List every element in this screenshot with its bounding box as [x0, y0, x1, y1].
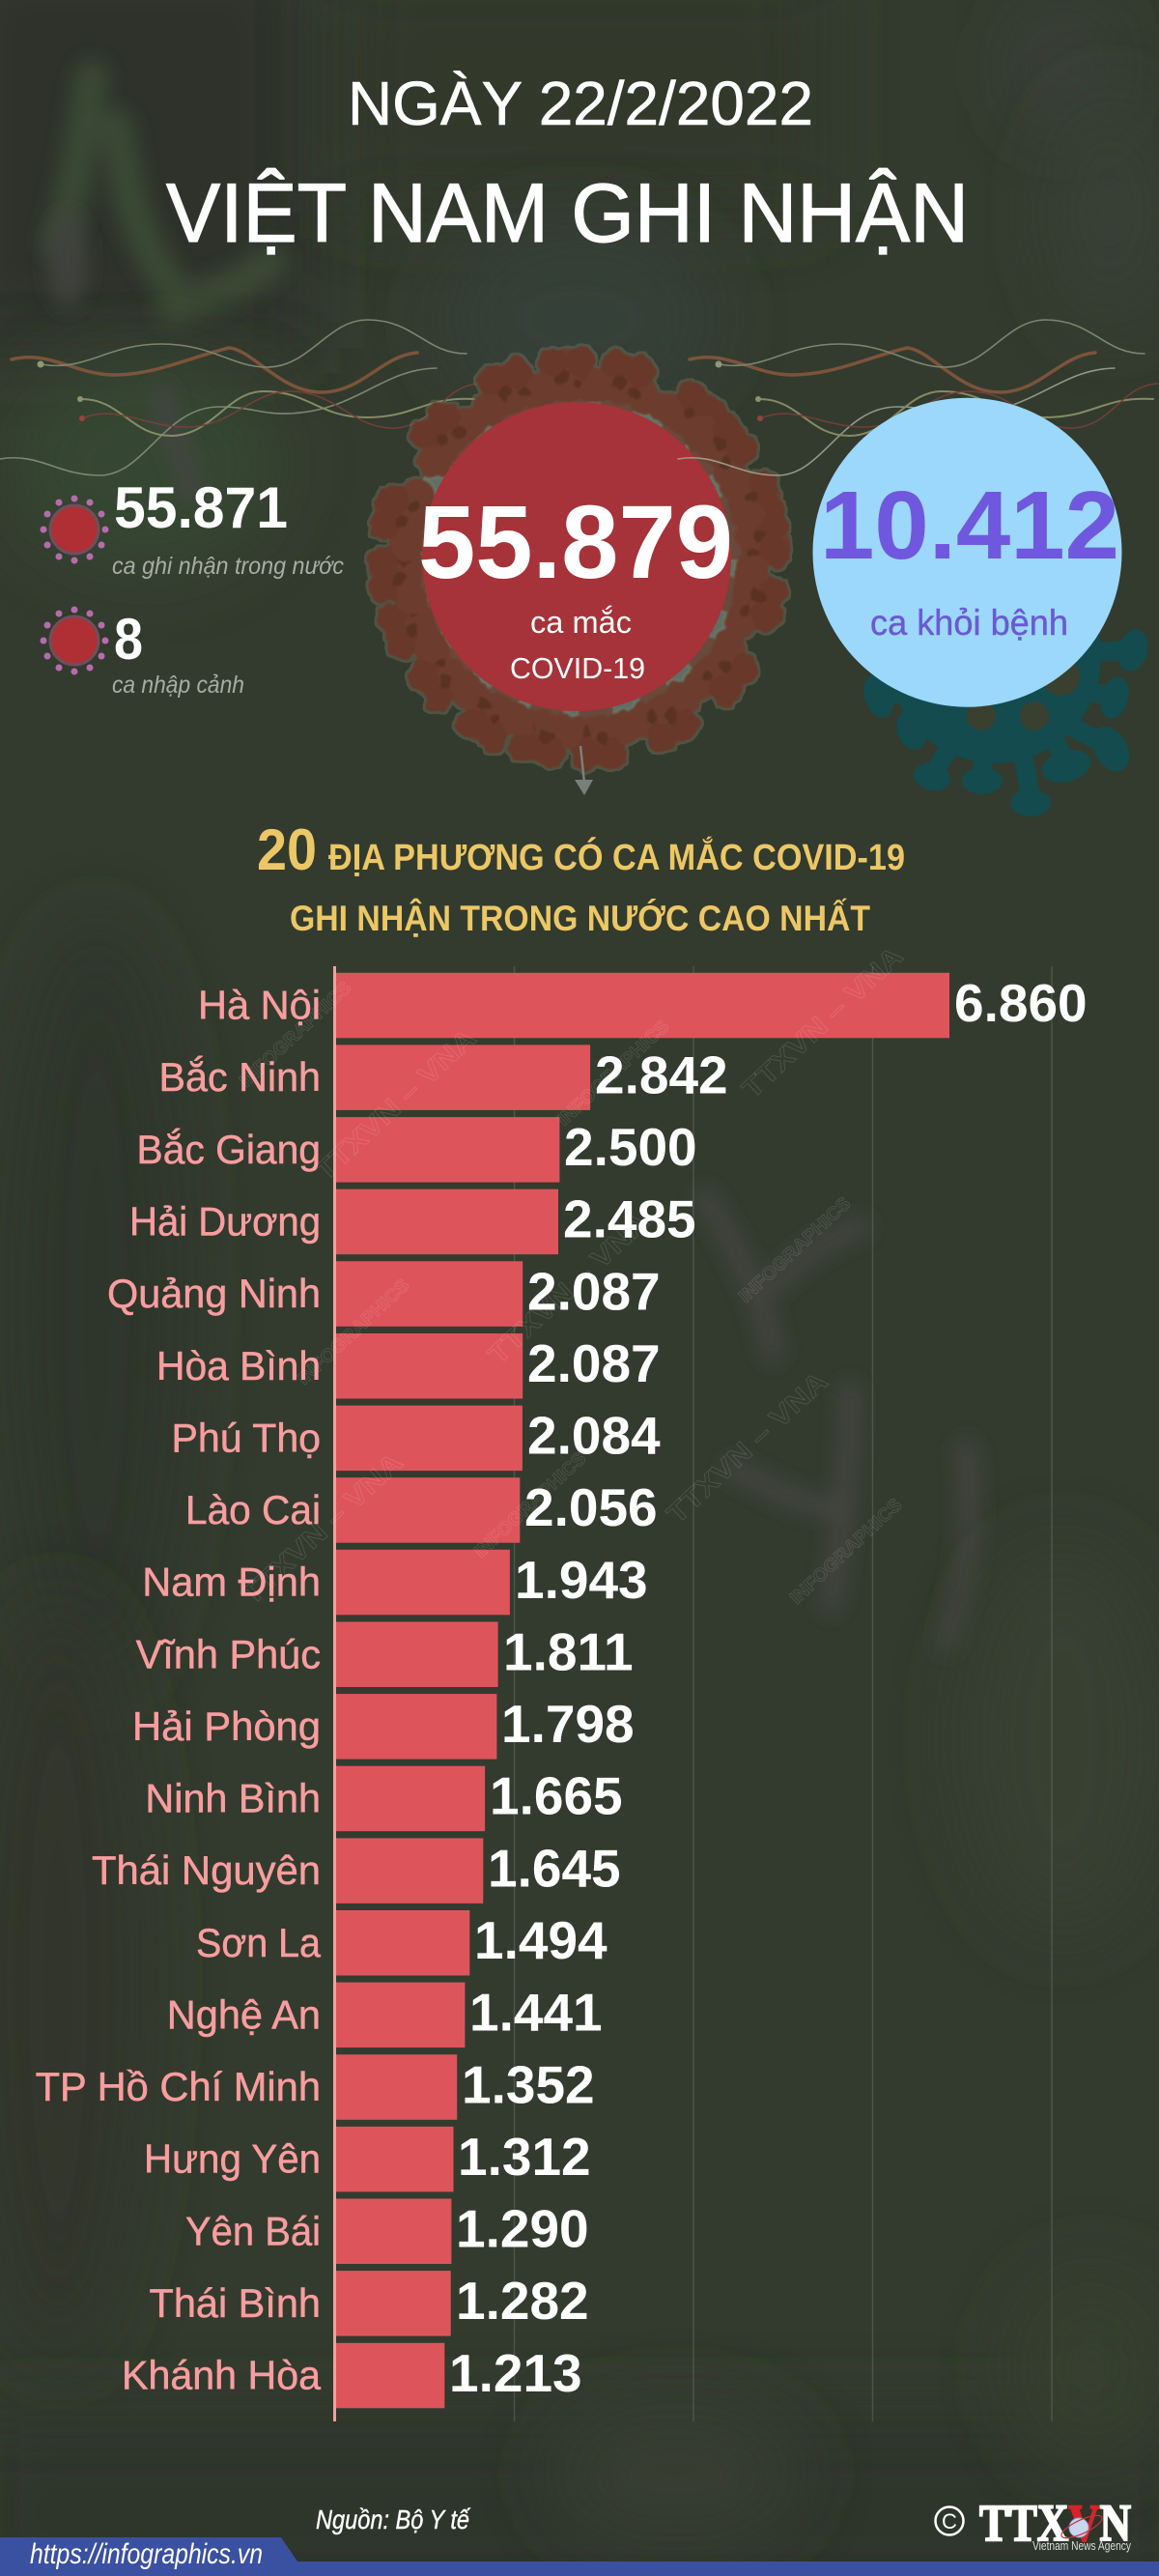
chart heading: ĐỊA PHƯƠNG CÓ CA MẮC COVID-19: [328, 836, 905, 878]
row: Yên Bái: 1.290: [456, 2199, 589, 2259]
row: Hải Phòng: Hải Phòng: [132, 1703, 321, 1749]
large coronavirus illustration: [363, 342, 796, 775]
total cases caption: ca mắc: [530, 605, 632, 640]
watermarks: [236, 940, 909, 1611]
row: Phú Thọ: [172, 1406, 661, 1471]
row: TP Hồ Chí Minh: [36, 2054, 595, 2120]
row: Nghệ An: 1.441: [469, 1983, 603, 2043]
watermarks: INFOGRAPHICS: [294, 1275, 413, 1389]
row: Hưng Yên: 1.312: [458, 2127, 591, 2187]
watermarks: TTXVN – VNA: [309, 1022, 482, 1187]
source note: Nguồn: Bộ Y tế: [316, 2504, 471, 2534]
row: Bắc Ninh: 2.842: [595, 1045, 728, 1104]
blue recovered circle: [813, 398, 1122, 707]
row: Hưng Yên: Hưng Yên: [144, 2136, 321, 2182]
watermarks: INFOGRAPHICS: [470, 1448, 590, 1562]
recovered number: 10.412: [820, 472, 1119, 580]
icon: small virus, domestic: [41, 495, 108, 564]
watermarks: TTXVN – VNA: [661, 1365, 834, 1530]
row: Hưng Yên: [144, 2127, 591, 2191]
row: Nam Định: 1.943: [515, 1550, 648, 1610]
row: TP Hồ Chí Minh: 1.352: [462, 2054, 595, 2114]
bar chart: 20 localities: [36, 966, 1088, 2421]
watermarks: TTXVN – VNA: [482, 1206, 655, 1370]
recovered caption: ca khỏi bệnh: [870, 603, 1068, 643]
decorative wavy lines: right: [678, 320, 1158, 475]
row: Thái Nguyên: Thái Nguyên: [92, 1847, 321, 1893]
copyright symbol: C: [942, 2509, 957, 2533]
footer band with URL: https://infographics.vn: [30, 2538, 263, 2570]
row: Hòa Bình: [156, 1333, 661, 1399]
row: Nam Định: Nam Định: [142, 1560, 321, 1605]
imported cases caption: ca nhập cảnh: [112, 672, 244, 699]
watermarks: INFOGRAPHICS: [735, 1193, 855, 1307]
row: Yên Bái: Yên Bái: [185, 2208, 321, 2253]
row: Ninh Bình: [145, 1766, 623, 1831]
row: Hòa Bình: 2.087: [527, 1333, 661, 1393]
row: Lào Cai: [185, 1477, 658, 1543]
row: Hải Dương: [129, 1189, 696, 1254]
row: Nghệ An: Nghệ An: [167, 1991, 321, 2037]
row: Bắc Giang: 2.500: [564, 1117, 697, 1177]
row: Nam Định: [142, 1550, 648, 1615]
row: Bắc Giang: [137, 1117, 697, 1183]
row: Phú Thọ: 2.084: [527, 1406, 661, 1466]
row: Vĩnh Phúc: [136, 1621, 634, 1687]
row: Bắc Ninh: [158, 1045, 728, 1110]
row: TP Hồ Chí Minh: TP Hồ Chí Minh: [36, 2064, 321, 2109]
icon: small virus, imported: [41, 607, 108, 674]
row: Sơn La: [196, 1910, 608, 1975]
total cases caption: [510, 605, 645, 685]
row: Hà Nội: Hà Nội: [198, 983, 321, 1028]
title: date: NGÀY 22/2/2022: [348, 69, 813, 138]
row: Hải Phòng: 1.798: [501, 1694, 635, 1754]
imported cases number: 8: [114, 607, 143, 672]
row: Ninh Bình: 1.665: [490, 1766, 623, 1826]
chart heading: [257, 817, 905, 938]
row: Lào Cai: Lào Cai: [185, 1487, 321, 1532]
row: Vĩnh Phúc: Vĩnh Phúc: [136, 1631, 321, 1676]
watermarks: INFOGRAPHICS: [236, 978, 355, 1092]
title: headline: VIỆT NAM GHI NHẬN: [166, 167, 969, 260]
row: Khánh Hòa: Khánh Hòa: [122, 2353, 322, 2398]
chart heading: GHI NHẬN TRONG NƯỚC CAO NHẤT: [290, 898, 870, 938]
watermarks: TTXVN – VNA: [736, 940, 909, 1104]
row: Hải Phòng: [132, 1694, 635, 1760]
row: Hà Nội: [198, 973, 1088, 1038]
domestic cases number: 55.871: [114, 475, 288, 540]
watermarks: INFOGRAPHICS: [553, 1016, 673, 1131]
row: Hải Dương: Hải Dương: [129, 1198, 321, 1245]
row: Thái Bình: [149, 2271, 589, 2336]
chart axis: [333, 966, 336, 2421]
decorative wavy lines: left: [0, 320, 480, 475]
row: Quảng Ninh: [107, 1261, 661, 1327]
row: Vĩnh Phúc: 1.811: [503, 1621, 634, 1681]
row: Ninh Bình: Ninh Bình: [145, 1776, 321, 1820]
row: Thái Bình: 1.282: [456, 2271, 589, 2331]
row: Bắc Ninh: Bắc Ninh: [158, 1054, 321, 1100]
row: Thái Nguyên: [92, 1838, 621, 1903]
red total cases circle: [422, 402, 731, 711]
arrow down to chart: [575, 746, 593, 795]
row: Lào Cai: 2.056: [524, 1477, 658, 1537]
row: Khánh Hòa: [122, 2343, 582, 2408]
domestic cases caption: ca ghi nhận trong nước: [112, 553, 344, 580]
total cases caption: COVID-19: [510, 651, 645, 685]
row: Hòa Bình: Hòa Bình: [156, 1343, 321, 1388]
row: Hải Dương: 2.485: [563, 1189, 696, 1249]
row: Quảng Ninh: 2.087: [527, 1261, 661, 1321]
row: Nghệ An: [167, 1983, 603, 2047]
row: Bắc Giang: Bắc Giang: [137, 1127, 321, 1172]
footer band with URL: [0, 2537, 1159, 2576]
watermarks: TTXVN – VNA: [236, 1446, 409, 1611]
row: Khánh Hòa: 1.213: [449, 2343, 582, 2403]
row: Phú Thọ: Phú Thọ: [172, 1415, 321, 1460]
row: Hà Nội: 6.860: [954, 973, 1088, 1033]
teal virus icon: [860, 551, 1152, 816]
total cases number: 55.879: [418, 483, 733, 600]
row: Sơn La: 1.494: [474, 1910, 608, 1970]
row: Quảng Ninh: Quảng Ninh: [107, 1271, 321, 1316]
row: Thái Bình: Thái Bình: [149, 2280, 321, 2326]
TTXVN logo: Vietnam News Agency: [1032, 2538, 1131, 2553]
row: Sơn La: Sơn La: [196, 1920, 322, 1965]
TTXVN logo: TTXVN: [979, 2494, 1131, 2552]
row: Thái Nguyên: 1.645: [488, 1838, 621, 1898]
watermarks: INFOGRAPHICS: [786, 1495, 906, 1609]
copyright symbol: [935, 2506, 964, 2535]
row: Yên Bái: [185, 2199, 589, 2264]
chart heading: 20: [257, 817, 317, 882]
